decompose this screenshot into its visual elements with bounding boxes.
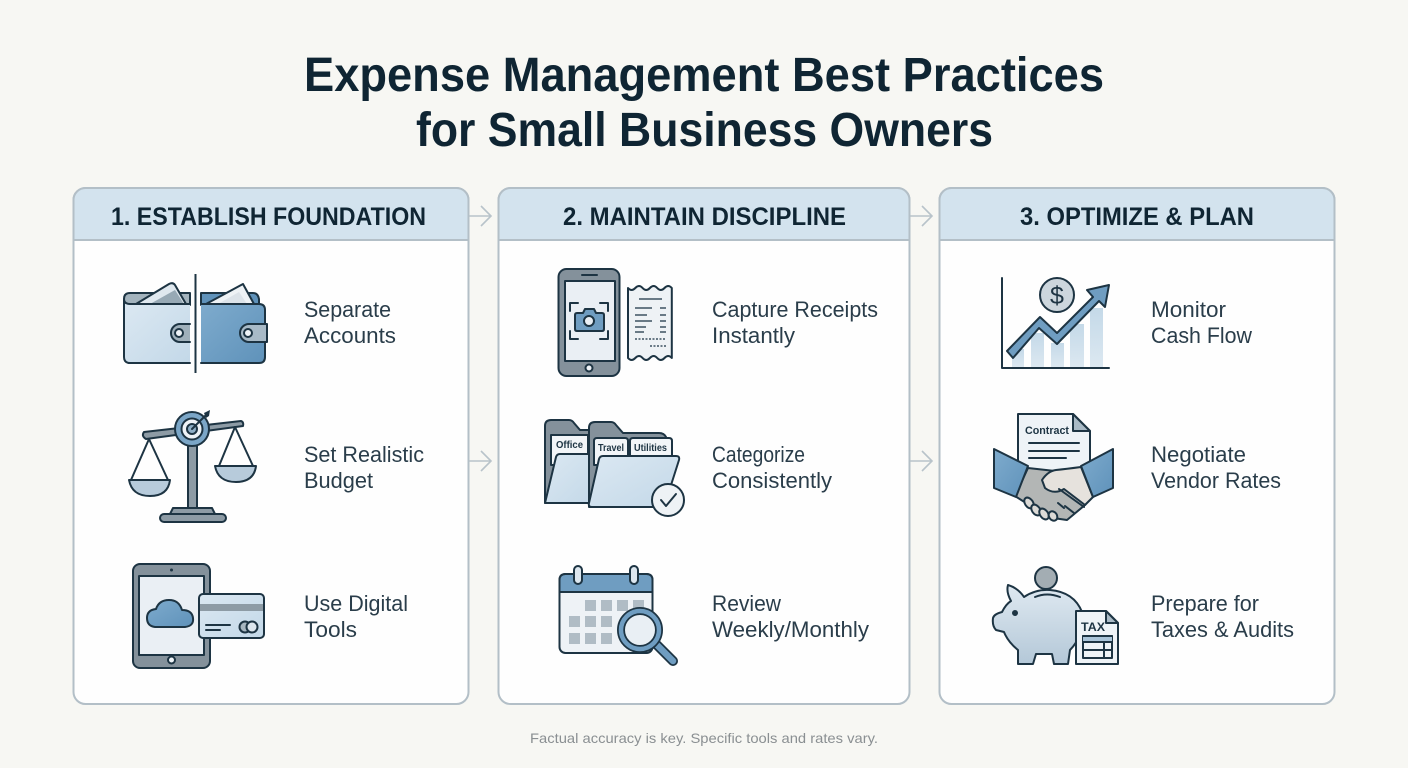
heading: maintain discipline <box>498 188 910 240</box>
label: negotiate vendor rates <box>1151 442 1281 493</box>
arrow: panel 2 to 3 top <box>910 206 932 226</box>
arrow: panel 1 to 2 top <box>469 206 491 226</box>
icon: split wallet <box>124 274 267 373</box>
label: monitor cash flow <box>1151 297 1252 348</box>
heading: optimize and plan <box>940 188 1334 240</box>
label: categorize consistently <box>712 442 832 493</box>
label: review weekly/monthly <box>712 591 869 642</box>
label: monitor cash flow: Cash Flow <box>1151 323 1252 348</box>
label: negotiate vendor rates: Negotiate <box>1151 442 1246 467</box>
label: separate accounts: Accounts <box>304 323 396 348</box>
label: separate accounts <box>304 297 396 348</box>
label: categorize consistently: Consistently <box>712 468 832 493</box>
icon: contract and handshake <box>994 414 1113 522</box>
icon: labelled folders with check: Utilities <box>634 443 667 454</box>
panel: 2. maintain discipline <box>498 188 910 704</box>
icon: piggy bank and tax form: TAX <box>1081 620 1105 634</box>
heading: optimize and plan: 3. OPTIMIZE & PLAN <box>1020 203 1254 231</box>
arrow: panel 1 to 2 middle <box>469 451 491 471</box>
icon: piggy bank and tax form <box>993 567 1118 664</box>
arrow: panel 2 to 3 middle <box>910 451 932 471</box>
label: capture receipts instantly <box>712 297 878 348</box>
icon: balance scale with target <box>129 410 256 522</box>
label: monitor cash flow: Monitor <box>1151 297 1226 322</box>
label: negotiate vendor rates: Vendor Rates <box>1151 468 1281 493</box>
label: capture receipts instantly: Capture Receipts <box>712 297 878 322</box>
footnote: Factual accuracy is key. Specific tools and rates vary. <box>530 730 878 746</box>
title: Expense Management Best Practices <box>304 49 1104 102</box>
label: review weekly/monthly: Review <box>712 591 781 616</box>
label: prepare for taxes and audits <box>1151 591 1294 642</box>
label: prepare for taxes and audits: Prepare for <box>1151 591 1259 616</box>
label: set realistic budget: Set Realistic <box>304 442 424 467</box>
icon: cash flow chart: $ <box>1050 282 1064 310</box>
label: prepare for taxes and audits: Taxes & Audits <box>1151 617 1294 642</box>
label: separate accounts: Separate <box>304 297 391 322</box>
heading: establish foundation <box>74 188 468 240</box>
heading: establish foundation: 1. ESTABLISH FOUNDATION <box>111 203 426 231</box>
icon: labelled folders with check: Travel <box>598 443 624 454</box>
icon: phone capturing receipt <box>558 269 672 376</box>
label: use digital tools <box>304 591 408 642</box>
icon: contract and handshake: Contract <box>1025 425 1069 437</box>
title: for Small Business Owners <box>416 104 993 157</box>
icon: labelled folders with check <box>545 420 684 516</box>
label: capture receipts instantly: Instantly <box>712 323 795 348</box>
label: set realistic budget: Budget <box>304 468 373 493</box>
icon: labelled folders with check: Office <box>556 440 583 451</box>
icon: tablet with cloud and card <box>133 564 264 668</box>
title <box>304 49 1104 157</box>
panel: 1. establish foundation <box>74 188 468 704</box>
label: use digital tools: Use Digital <box>304 591 408 616</box>
label: set realistic budget <box>304 442 424 493</box>
panel: 3. optimize and plan <box>940 188 1334 704</box>
label: review weekly/monthly: Weekly/Monthly <box>712 617 869 642</box>
icon: calendar with magnifier <box>560 566 673 661</box>
label: categorize consistently: Categorize <box>712 442 805 467</box>
heading: maintain discipline: 2. MAINTAIN DISCIPLINE <box>563 203 846 231</box>
label: use digital tools: Tools <box>304 617 357 642</box>
icon: cash flow chart <box>1002 278 1109 368</box>
